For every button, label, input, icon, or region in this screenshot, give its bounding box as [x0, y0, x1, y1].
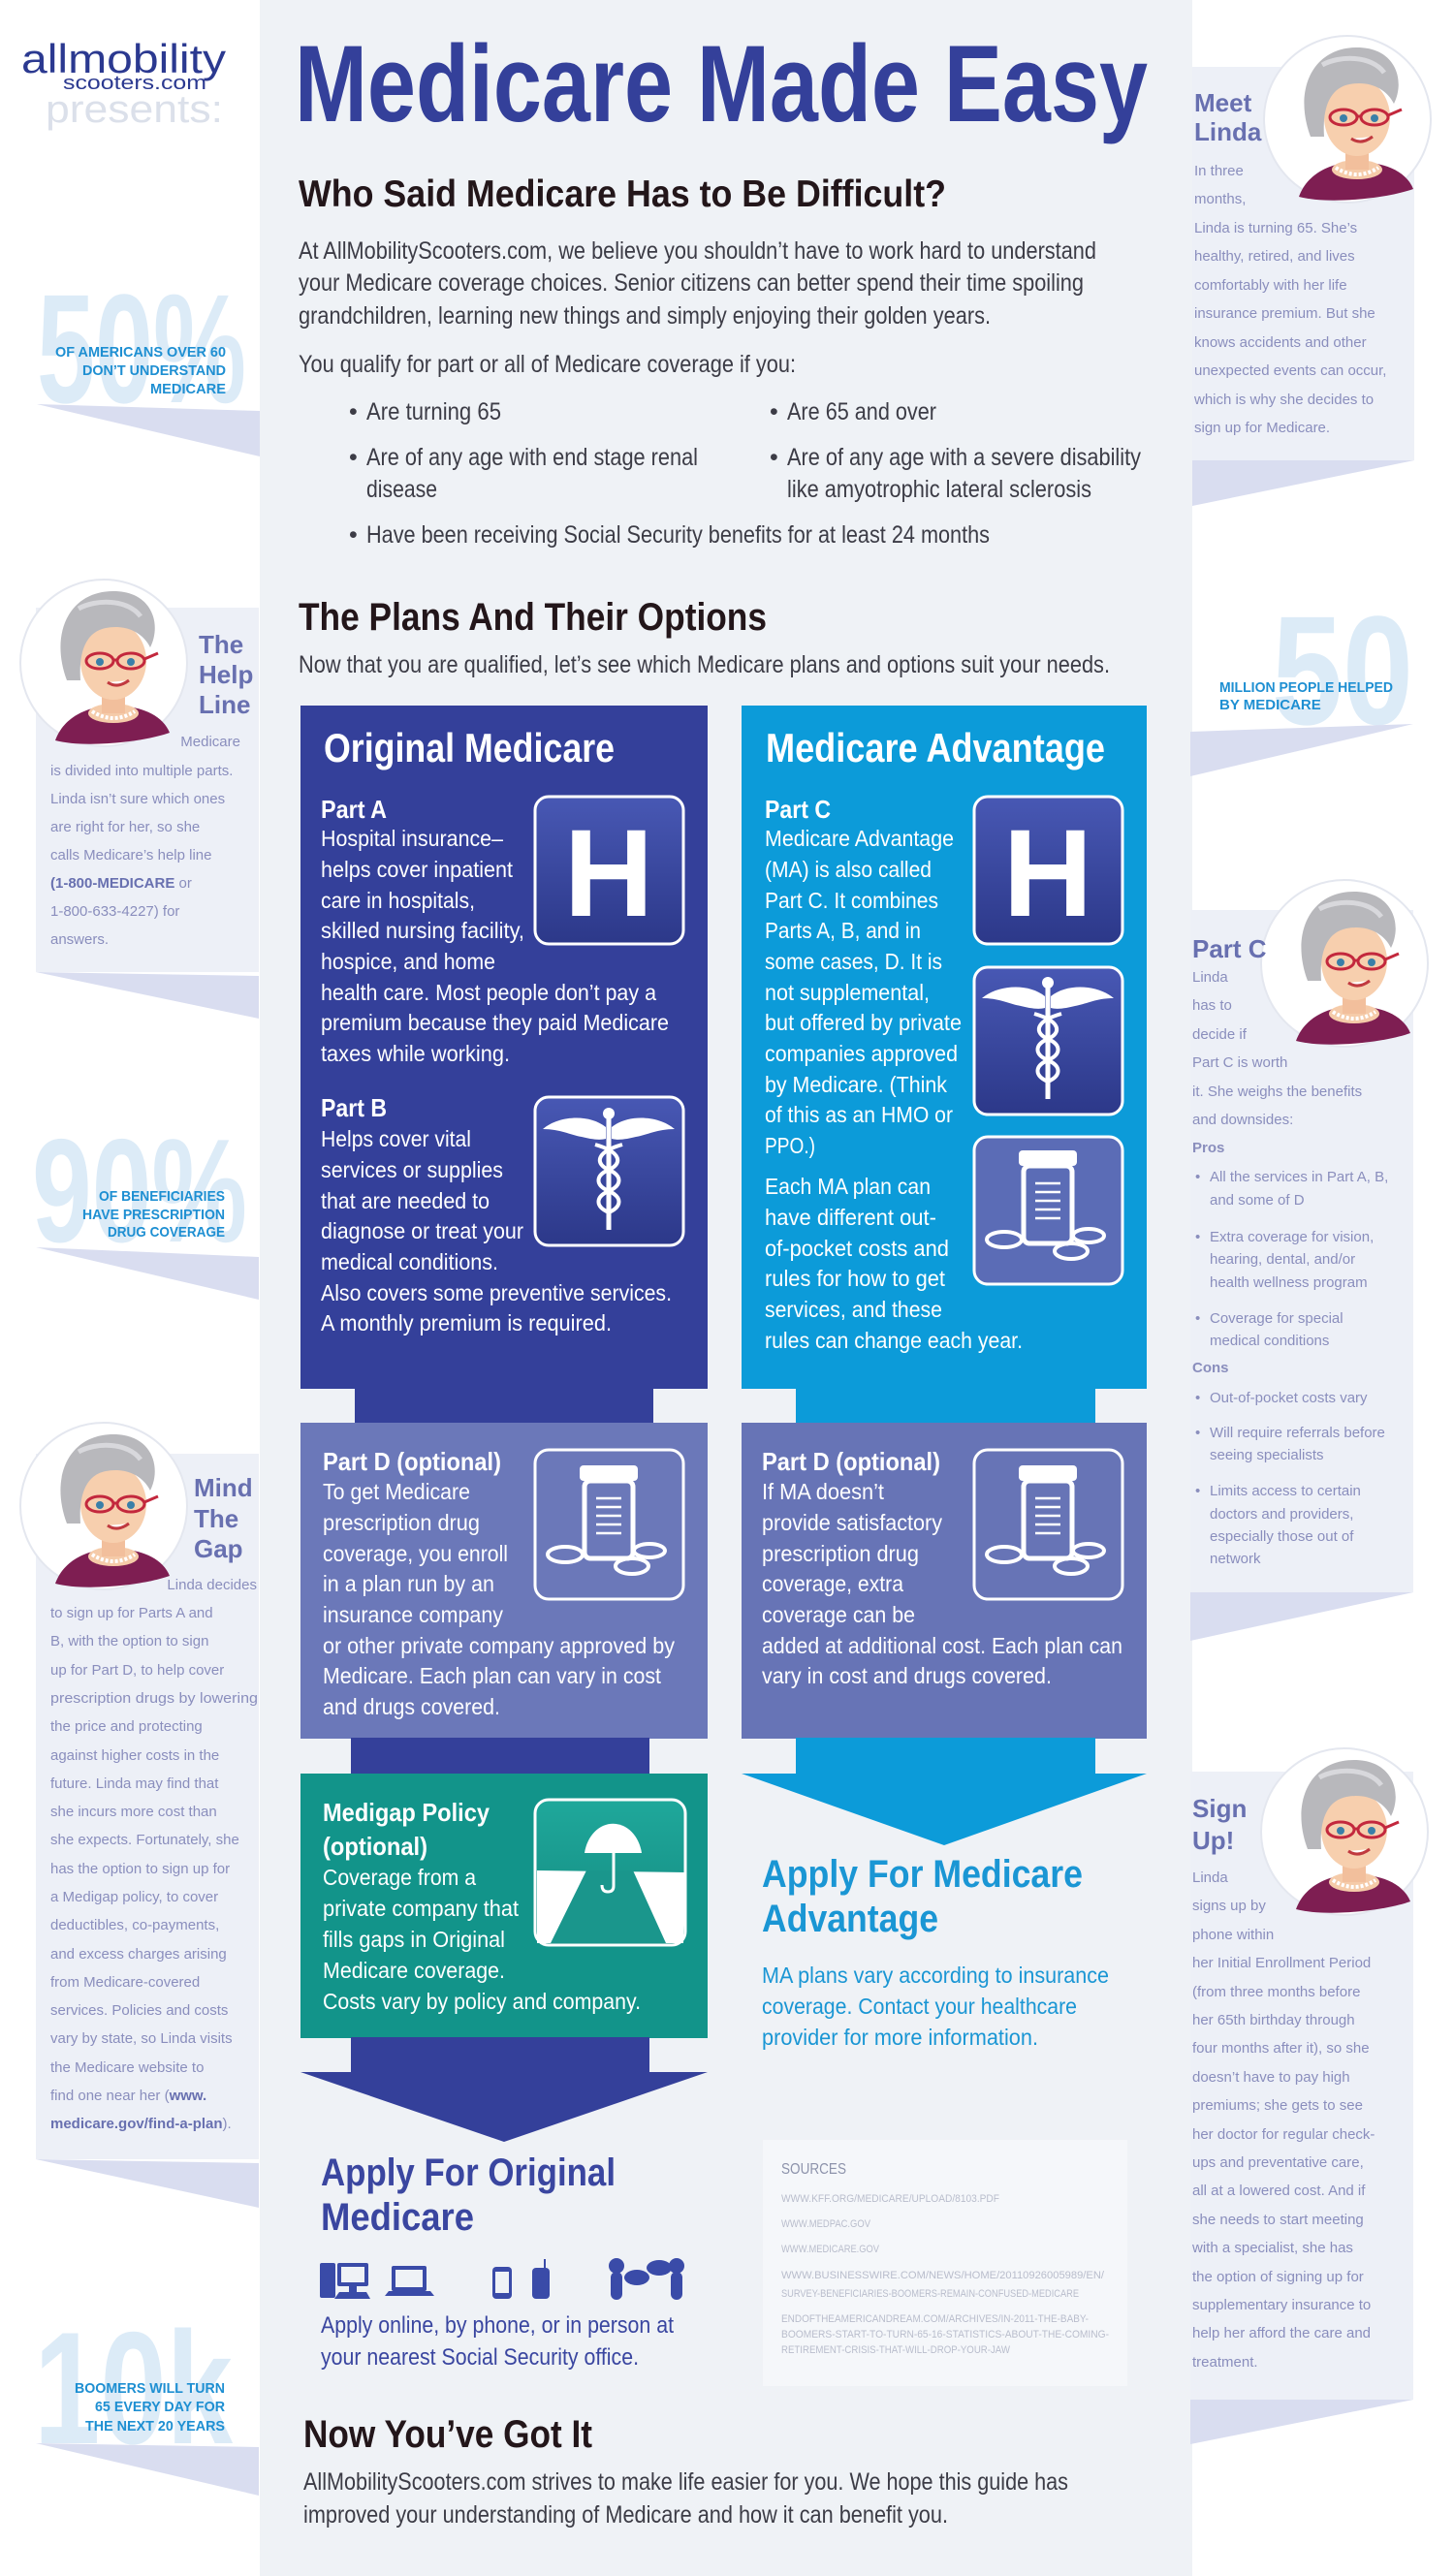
sidebar: part c: •: [1195, 1483, 1200, 1499]
sidebar: meet linda: Meet: [1194, 88, 1252, 117]
panel: original medicare: A monthly premium is required.: [321, 1310, 612, 1335]
apply for original medicare: [320, 2152, 684, 2371]
sidebar: help line: 1-800-633-4227) for: [50, 903, 179, 920]
sidebar: part c: Part C is worth: [1192, 1054, 1287, 1071]
stat: 10k: 65 EVERY DAY FOR: [95, 2399, 225, 2415]
panel: medicare advantage: by Medicare. (Think: [765, 1072, 947, 1097]
panel: part d original: To get Medicare: [323, 1479, 470, 1504]
qualify list: •: [770, 444, 778, 471]
panel: medicare advantage: Medicare Advantage: [766, 725, 1105, 770]
sidebar: part c: Pros: [1192, 1140, 1224, 1156]
panel: part d original: coverage, you enroll: [323, 1541, 508, 1566]
logo: [21, 36, 226, 131]
sidebar: mind the gap: Gap: [194, 1534, 243, 1563]
sidebar: mind the gap: has the option to sign up for: [50, 1861, 230, 1877]
panel: medicare advantage: PPO.): [765, 1133, 815, 1158]
apply for medicare advantage: coverage. Contact your healthcare: [762, 1994, 1077, 2019]
sidebar: sign up: ups and preventative care,: [1192, 2154, 1364, 2171]
qualify list: •: [349, 521, 358, 549]
intro paragraph: At AllMobilityScooters.com, we believe you shouldn’t have to work hard to understand: [299, 237, 1096, 265]
sidebar: part c: Part C: [1192, 934, 1267, 963]
panel: medicare advantage: (MA) is also called: [765, 857, 932, 882]
panel: medigap: Medicare coverage.: [323, 1958, 505, 1983]
panel: part d original: [300, 1423, 708, 1739]
panel: part d original: in a plan run by an: [323, 1571, 494, 1596]
sidebar: mind the gap: and excess charges arising: [50, 1946, 227, 1963]
icon: caduceus: [535, 1097, 683, 1245]
sidebar: mind the gap: [20, 1423, 259, 2208]
sidebar: part c: and downsides:: [1192, 1112, 1293, 1128]
qualify list: You qualify for part or all of Medicare coverage if you:: [299, 351, 796, 378]
sidebar: mind the gap: deductibles, co-payments,: [50, 1917, 219, 1933]
stat: 50 million: [1190, 583, 1413, 776]
qualify list: [299, 351, 1141, 549]
sidebar: help line: [20, 580, 259, 1019]
sidebar: help line: Linda isn’t sure which ones: [50, 791, 225, 807]
central panel background: [260, 0, 1192, 2576]
sidebar: sign up: supplementary insurance to: [1192, 2297, 1371, 2313]
sidebar: sign up: her 65th birthday through: [1192, 2012, 1355, 2028]
connector stubs: [355, 1388, 653, 1424]
stat: 50 million: 50: [1272, 583, 1413, 757]
panel: medicare advantage: services, and these: [765, 1297, 942, 1322]
sidebar: mind the gap: B, with the option to sign: [50, 1633, 208, 1649]
panel: part d advantage: coverage, extra: [762, 1571, 903, 1596]
sidebar: mind the gap: she incurs more cost than: [50, 1804, 217, 1820]
sidebar: sign up: with a specialist, she has: [1191, 2240, 1353, 2256]
sidebar: part c: Cons: [1192, 1360, 1229, 1376]
conclusion: Now You’ve Got It: [303, 2413, 592, 2456]
sidebar: mind the gap: the price and protecting: [50, 1718, 203, 1735]
apply for medicare advantage: [762, 1853, 1109, 2050]
icon: hospital H (advantage): [974, 797, 1122, 944]
sidebar: mind the gap: she expects. Fortunately, she: [50, 1832, 239, 1848]
panel: part d original: and drugs covered.: [323, 1694, 500, 1719]
stat: 90%: HAVE PRESCRIPTION: [82, 1207, 225, 1223]
sidebar: meet linda: Linda: [1194, 117, 1262, 146]
panel: medicare advantage: Part C. It combines: [765, 888, 938, 913]
sidebar: sign up: four months after it), so she: [1192, 2040, 1370, 2057]
panel: medigap: Medigap Policy: [323, 1798, 490, 1827]
sidebar: help line: (1-800-MEDICARE or: [50, 875, 192, 892]
panel: part d original: Medicare. Each plan can vary in cost: [323, 1663, 662, 1688]
sidebar: sign up: Sign: [1192, 1794, 1247, 1823]
sidebar: meet linda: unexpected events can occur,: [1194, 362, 1386, 379]
logo: allmobility: [21, 36, 226, 81]
sidebar: sign up: her doctor for regular check-: [1192, 2126, 1375, 2143]
panel: original medicare: Original Medicare: [324, 725, 615, 770]
panel: original medicare: Part B: [321, 1093, 387, 1122]
sources box: RETIREMENT-CRISIS-THAT-WILL-DROP-YOUR-JAW: [781, 2344, 1011, 2356]
panel: original medicare: [300, 706, 708, 1389]
sidebar: sign up: signs up by: [1192, 1898, 1266, 1914]
panel: part d original: or other private company approved by: [323, 1633, 675, 1658]
panel: original medicare: Helps cover vital: [321, 1126, 471, 1151]
apply for medicare advantage: Advantage: [762, 1898, 938, 1940]
panel: medicare advantage: Medicare Advantage: [765, 826, 954, 851]
sidebar: part c: Extra coverage for vision,: [1210, 1229, 1374, 1245]
sidebar: part c: seeing specialists: [1210, 1447, 1324, 1463]
qualify list: •: [770, 398, 778, 425]
stat: 10k: THE NEXT 20 YEARS: [85, 2418, 225, 2435]
stat: 50 million: BY MEDICARE: [1219, 697, 1321, 713]
apply for original medicare: Apply For Original: [321, 2152, 616, 2194]
stat: 50%: DON’T UNDERSTAND: [82, 362, 226, 379]
panel: medicare advantage: Part C: [765, 795, 831, 824]
sidebar: part c: health wellness program: [1210, 1274, 1368, 1291]
qualify list: like amyotrophic lateral sclerosis: [787, 476, 1091, 503]
sidebar: mind the gap: a Medigap policy, to cover: [50, 1889, 218, 1905]
apply for original medicare: Medicare: [321, 2196, 474, 2239]
sidebar: sign up: she needs to start meeting: [1192, 2212, 1364, 2228]
panel: original medicare: hospice, and home: [321, 949, 495, 974]
stat: 50%: MEDICARE: [150, 381, 226, 397]
stat: 90%: OF BENEFICIARIES: [99, 1188, 225, 1205]
apply for medicare advantage: provider for more information.: [762, 2025, 1038, 2050]
panel: original medicare: taxes while working.: [321, 1041, 510, 1066]
sidebar: meet linda: Linda is turning 65. She’s: [1194, 220, 1357, 236]
sidebar: help line: Line: [199, 690, 250, 719]
sidebar: part c: •: [1195, 1229, 1200, 1245]
stat: 90%: [32, 1109, 259, 1300]
sidebar: mind the gap: to sign up for Parts A and: [50, 1605, 213, 1621]
conclusion: AllMobilityScooters.com strives to make life easier for you. We hope this guide has: [303, 2468, 1068, 2496]
sidebar: part c: Coverage for special: [1210, 1310, 1343, 1327]
panel: medicare advantage: not supplemental,: [765, 980, 930, 1005]
qualify list: •: [349, 398, 358, 425]
sidebar: mind the gap: up for Part D, to help cover: [50, 1662, 224, 1679]
panel: part d original: prescription drug: [323, 1510, 480, 1535]
heading: plans: [299, 596, 1110, 678]
logo: scooters.com: [63, 73, 206, 94]
panel: original medicare: diagnose or treat your: [321, 1218, 523, 1243]
panel: part d advantage: Part D (optional): [762, 1447, 940, 1476]
qualify list: •: [349, 444, 358, 471]
sidebar: mind the gap: prescription drugs by lowering: [50, 1690, 258, 1707]
icon: pills (advantage): [974, 1137, 1122, 1284]
stub to medigap: [351, 1738, 649, 1775]
panel: part d advantage: vary in cost and drugs covered.: [762, 1663, 1052, 1688]
sidebar: part c: •: [1195, 1310, 1200, 1327]
sources box: WWW.MEDPAC.GOV: [781, 2218, 871, 2230]
sidebar: sign up: phone within: [1192, 1927, 1274, 1943]
panel: original medicare: that are needed to: [321, 1188, 490, 1213]
qualify list: Are 65 and over: [787, 398, 936, 425]
arrow: advantage: [742, 1738, 1147, 1845]
sidebar: part c: medical conditions: [1210, 1333, 1329, 1349]
sidebar: mind the gap: The: [194, 1504, 238, 1533]
stat: 50 million: MILLION PEOPLE HELPED: [1219, 679, 1393, 696]
sidebar: part c: especially those out of: [1210, 1528, 1354, 1545]
panel: medicare advantage: companies approved: [765, 1041, 958, 1066]
avatar: linda (sign up): [1261, 1748, 1428, 1915]
panel: medigap: fills gaps in Original: [323, 1927, 505, 1952]
apply for medicare advantage: Apply For Medicare: [762, 1853, 1083, 1896]
icon: caduceus (advantage): [974, 967, 1122, 1115]
sources box: WWW.MEDICARE.GOV: [781, 2244, 880, 2255]
panel: medicare advantage: but offered by private: [765, 1010, 962, 1035]
apply for original medicare: Apply online, by phone, or in person at: [321, 2312, 674, 2339]
intro paragraph: your Medicare coverage choices. Senior citizens can better spend their time spoiling: [299, 269, 1084, 297]
panel: part d advantage: added at additional cost. Each plan can: [762, 1633, 1122, 1658]
sources box: BOOMERS-START-TO-TURN-65-16-STATISTICS-ABOUT-THE-COMING-: [781, 2329, 1109, 2340]
intro paragraph: grandchildren, learning new things and simply enjoying their golden years.: [299, 302, 991, 330]
sidebar: sign up: the option of signing up for: [1192, 2269, 1364, 2285]
sidebar: part c: •: [1195, 1169, 1200, 1185]
sidebar: sign up: Up!: [1192, 1826, 1234, 1855]
logo: presents:: [46, 88, 223, 131]
sidebar: sign up: her Initial Enrollment Period: [1192, 1955, 1371, 1971]
panel: original medicare: care in hospitals,: [321, 888, 475, 913]
panel: medicare advantage: [742, 706, 1147, 1389]
sidebar: help line: is divided into multiple parts.: [50, 763, 233, 779]
avatar: linda: [20, 580, 187, 746]
avatar: linda (gap): [20, 1423, 187, 1589]
sidebar: meet linda: knows accidents and other: [1194, 334, 1367, 351]
sidebar: help line: answers.: [50, 931, 109, 948]
qualify list: Have been receiving Social Security benefits for at least 24 months: [366, 521, 990, 549]
sources box: ENDOFTHEAMERICANDREAM.COM/ARCHIVES/IN-2011-THE-BABY-: [781, 2313, 1089, 2325]
qualify list: Are of any age with end stage renal: [366, 444, 698, 471]
panel: part d advantage: prescription drug: [762, 1541, 919, 1566]
intro paragraph: [299, 237, 1096, 330]
sidebar: sign up: doesn’t have to pay high: [1192, 2069, 1350, 2086]
icon: umbrella: [535, 1800, 685, 1945]
sidebar: mind the gap: services. Policies and costs: [50, 2002, 228, 2019]
stat: 90%: 90%: [32, 1109, 247, 1273]
stat: 50%: 50%: [37, 262, 246, 435]
panel: medicare advantage: of this as an HMO or: [765, 1102, 953, 1127]
sidebar: part c: •: [1195, 1390, 1200, 1406]
panel: medigap: private company that: [323, 1896, 520, 1921]
sources box: WWW.BUSINESSWIRE.COM/NEWS/HOME/20110926005989/EN/: [781, 2270, 1105, 2281]
sidebar: part c: All the services in Part A, B,: [1210, 1169, 1388, 1185]
icon: hospital H (advantage): H: [1003, 804, 1092, 943]
sidebar: mind the gap: Mind: [194, 1473, 253, 1502]
sidebar: mind the gap: the Medicare website to: [50, 2059, 204, 2076]
heading: who said: Who Said Medicare Has to Be Difficult?: [299, 173, 946, 215]
icon: hospital H: H: [564, 804, 653, 943]
sidebar: help line: calls Medicare’s help line: [50, 847, 211, 864]
sidebar: help line: are right for her, so she: [50, 819, 200, 835]
stat: 90%: DRUG COVERAGE: [108, 1224, 225, 1241]
arrow: original: [300, 2037, 708, 2142]
sidebar: part c: hearing, dental, and/or: [1210, 1251, 1355, 1268]
panel: medicare advantage: rules for how to get: [765, 1266, 946, 1291]
sidebar: meet linda: In three: [1194, 163, 1244, 179]
sidebar: sign up: help her afford the care and: [1192, 2325, 1371, 2341]
sidebar: part c: Out-of-pocket costs vary: [1210, 1390, 1368, 1406]
sidebar: part c: network: [1210, 1551, 1261, 1567]
panel: medigap: [300, 1774, 708, 2038]
panel: original medicare: health care. Most people don’t pay a: [321, 980, 656, 1005]
stat: 10k: 10k: [34, 2299, 233, 2477]
sources box: [763, 2140, 1127, 2386]
panel: medicare advantage: Each MA plan can: [765, 1174, 931, 1199]
panel: medigap: Costs vary by policy and company.: [323, 1989, 641, 2014]
panel: part d original: Part D (optional): [323, 1447, 501, 1476]
sources box: SOURCES: [781, 2161, 846, 2178]
sidebar: sign up: (from three months before: [1192, 1984, 1360, 2000]
sidebar: mind the gap: medicare.gov/find-a-plan).: [50, 2116, 232, 2132]
panel: part d advantage: provide satisfactory: [762, 1510, 942, 1535]
panel: original medicare: Also covers some preventive services.: [321, 1280, 672, 1305]
heading: plans: Now that you are qualified, let’s see which Medicare plans and options suit your needs.: [299, 651, 1110, 678]
sidebar: meet linda: insurance premium. But she: [1194, 305, 1375, 322]
panel: part d advantage: [742, 1423, 1147, 1739]
qualify list: disease: [366, 476, 437, 503]
sidebar: part c: [1190, 880, 1428, 1641]
sidebar: part c: and some of D: [1210, 1192, 1305, 1209]
sidebar: part c: Will require referrals before: [1210, 1425, 1385, 1441]
sidebar: part c: decide if: [1192, 1026, 1248, 1043]
sidebar: meet linda: which is why she decides to: [1193, 392, 1374, 408]
qualify list: Are turning 65: [366, 398, 501, 425]
sidebar: mind the gap: find one near her (www.: [50, 2088, 206, 2104]
panel: part d advantage: If MA doesn’t: [762, 1479, 885, 1504]
sidebar: meet linda: comfortably with her life: [1194, 277, 1347, 294]
sidebar: part c: Linda: [1192, 969, 1228, 986]
sidebar: part c: it. She weighs the benefits: [1192, 1084, 1362, 1100]
panel: part d original: insurance company: [323, 1602, 503, 1627]
sidebar: sign up: premiums; she gets to see: [1192, 2097, 1363, 2114]
panel: medigap: Coverage from a: [323, 1865, 476, 1890]
panel: medicare advantage: have different out-: [765, 1205, 936, 1230]
panel: original medicare: medical conditions.: [321, 1249, 498, 1274]
apply for medicare advantage: MA plans vary according to insurance: [762, 1963, 1109, 1988]
icon: pills (part d advantage): [974, 1450, 1122, 1599]
sidebar: sign up: all at a lowered cost. And if: [1192, 2183, 1366, 2199]
sidebar: sign up: treatment.: [1192, 2354, 1258, 2371]
sidebar: help line: Help: [199, 660, 253, 689]
avatar: linda (meet): [1264, 36, 1431, 203]
sidebar: part c: has to: [1192, 997, 1232, 1014]
panel: original medicare: helps cover inpatient: [321, 857, 514, 882]
sidebar: mind the gap: from Medicare-covered: [50, 1974, 200, 1991]
qualify list: Are of any age with a severe disability: [787, 444, 1141, 471]
conclusion: improved your understanding of Medicare and how it can benefit you.: [303, 2501, 948, 2529]
sidebar: mind the gap: future. Linda may find that: [50, 1775, 219, 1792]
stat: 50%: [37, 262, 260, 456]
icon: pills: [535, 1450, 683, 1599]
panel: original medicare: services or supplies: [321, 1157, 503, 1182]
panel: medicare advantage: some cases, D. It is: [765, 949, 942, 974]
panel: original medicare: Hospital insurance–: [321, 826, 503, 851]
panel: part d advantage: coverage can be: [762, 1602, 915, 1627]
icon: hospital H: [535, 797, 683, 944]
panel: original medicare: skilled nursing facility,: [321, 918, 524, 943]
sidebar: help line: The: [199, 630, 243, 659]
stat: 10k: BOOMERS WILL TURN: [75, 2380, 225, 2397]
title: Medicare Made Easy: [295, 23, 1148, 144]
apply for original medicare: your nearest Social Security office.: [321, 2344, 639, 2371]
panel: medigap: (optional): [323, 1832, 427, 1861]
stat: 50%: OF AMERICANS OVER 60: [55, 344, 226, 361]
panel: medicare advantage: rules can change each year.: [765, 1328, 1023, 1353]
sidebar: part c: •: [1195, 1425, 1200, 1441]
heading: plans: The Plans And Their Options: [299, 596, 767, 639]
icons: contact methods: [320, 2258, 684, 2300]
sources box: SURVEY-BENEFICIARIES-BOOMERS-REMAIN-CONFUSED-MEDICARE: [781, 2288, 1079, 2300]
sidebar: mind the gap: against higher costs in the: [50, 1747, 219, 1764]
panel: original medicare: premium because they paid Medicare: [321, 1010, 669, 1035]
sidebar: sign up: [1190, 1748, 1428, 2444]
sidebar: part c: Limits access to certain: [1210, 1483, 1361, 1499]
sources box: WWW.KFF.ORG/MEDICARE/UPLOAD/8103.PDF: [781, 2193, 999, 2205]
conclusion: [303, 2413, 1068, 2529]
sidebar: part c: doctors and providers,: [1210, 1506, 1353, 1523]
avatar: linda (part c): [1261, 880, 1428, 1047]
sidebar: mind the gap: Linda decides: [167, 1577, 257, 1593]
sidebar: meet linda: sign up for Medicare.: [1194, 420, 1330, 436]
sidebar: sign up: Linda: [1192, 1869, 1228, 1886]
sidebar: meet linda: healthy, retired, and lives: [1194, 248, 1355, 265]
panel: original medicare: Part A: [321, 795, 387, 824]
sidebar: help line: Medicare: [180, 734, 240, 750]
sidebar: meet linda: [1192, 36, 1431, 506]
sidebar: mind the gap: vary by state, so Linda visits: [50, 2030, 233, 2047]
sidebar: meet linda: months,: [1194, 191, 1246, 207]
panel: medicare advantage: of-pocket costs and: [765, 1236, 949, 1261]
panel: medicare advantage: Parts A, B, and in: [765, 918, 921, 943]
